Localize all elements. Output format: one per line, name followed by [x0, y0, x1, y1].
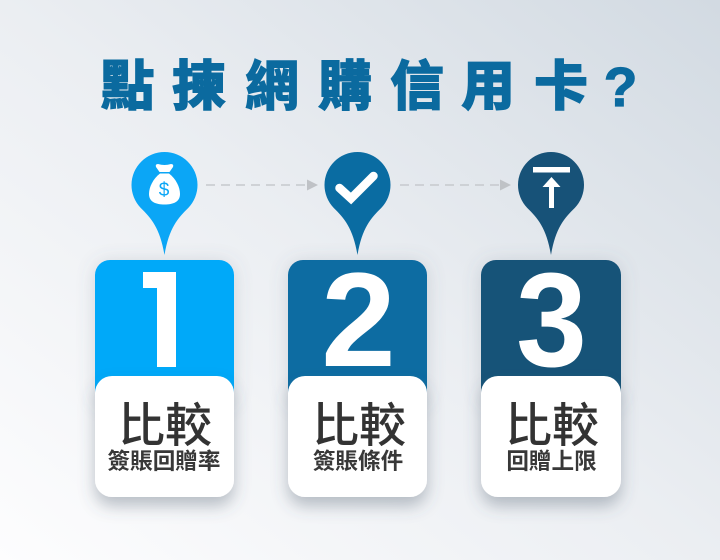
title [100, 56, 637, 118]
icon: money bag pin [132, 152, 198, 255]
panel: step 2 [288, 246, 427, 497]
title: 卡 [534, 57, 588, 117]
title: 揀 [172, 57, 226, 117]
number 1 [143, 272, 176, 367]
panel: step 1 [95, 243, 234, 497]
white label card 1 [95, 376, 234, 497]
icon: upper limit arrow pin [518, 152, 584, 255]
title: ? [604, 56, 637, 118]
white label card 2 [288, 376, 427, 497]
title: 用 [461, 57, 515, 117]
icon: money bag pin: $ [159, 180, 170, 201]
label: cashback rate: 簽賬回贈率 [108, 449, 220, 474]
heading: compare 3: 比較 [505, 399, 599, 452]
label: spending conditions: 簽賬條件 [313, 449, 403, 474]
arrow: step 1 to step 2 [206, 180, 318, 190]
title: 購 [318, 57, 372, 117]
heading: compare 1: 比較 [118, 399, 212, 452]
number 2: 2 [321, 246, 396, 395]
title: 信 [390, 57, 444, 117]
arrow: step 2 to step 3 [400, 180, 511, 190]
heading: compare 2: 比較 [312, 399, 406, 452]
number 1: 1 [125, 243, 201, 397]
panel: step 3 [481, 245, 621, 497]
icon: check mark pin [324, 152, 391, 255]
title: 點 [100, 57, 154, 117]
label: cashback ceiling: 回贈上限 [506, 449, 597, 474]
number 3: 3 [516, 245, 587, 395]
white label card 3 [481, 376, 621, 497]
title: 網 [245, 57, 299, 117]
